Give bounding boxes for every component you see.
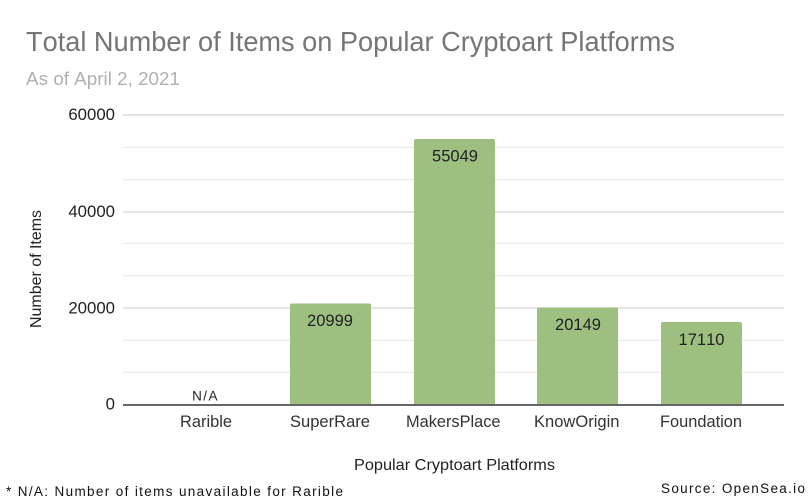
y-axis labels — [68, 105, 115, 414]
bar: SuperRare: 20999 — [307, 312, 353, 330]
source: Source: OpenSea.io — [661, 481, 805, 496]
title: Total Number of Items on Popular Cryptoart Platforms — [26, 26, 675, 57]
y-axis title: Number of Items — [28, 210, 45, 328]
x-axis baseline — [123, 404, 784, 406]
footnote: * N/A: Number of items unavailable for Rarible — [6, 484, 343, 499]
bar: SuperRare — [290, 304, 371, 405]
y-axis labels: 40000 — [68, 202, 115, 221]
bar: Foundation — [661, 322, 742, 405]
bar: KnowOrigin — [537, 308, 618, 405]
y-axis labels: 20000 — [68, 298, 115, 318]
bar: Foundation: 17110 — [679, 331, 724, 349]
N/A label for Rarible: N/A — [192, 388, 219, 404]
x-axis category labels: Foundation — [660, 413, 742, 431]
x-axis category labels: KnowOrigin — [534, 413, 620, 431]
x-axis category labels: SuperRare — [290, 413, 370, 431]
x-axis category labels: Rarible — [180, 413, 232, 431]
x-axis category labels: MakersPlace — [406, 413, 500, 431]
bar: KnowOrigin: 20149 — [555, 316, 601, 334]
y-axis labels: 60000 — [68, 105, 115, 124]
x-axis title: Popular Cryptoart Platforms — [354, 457, 555, 474]
bar: MakersPlace: 55049 — [432, 148, 478, 166]
y-axis labels: 0 — [106, 394, 115, 414]
x-axis category labels — [180, 413, 742, 431]
bar: MakersPlace — [414, 139, 495, 405]
subtitle: As of April 2, 2021 — [26, 68, 180, 89]
gridlines — [123, 115, 784, 372]
